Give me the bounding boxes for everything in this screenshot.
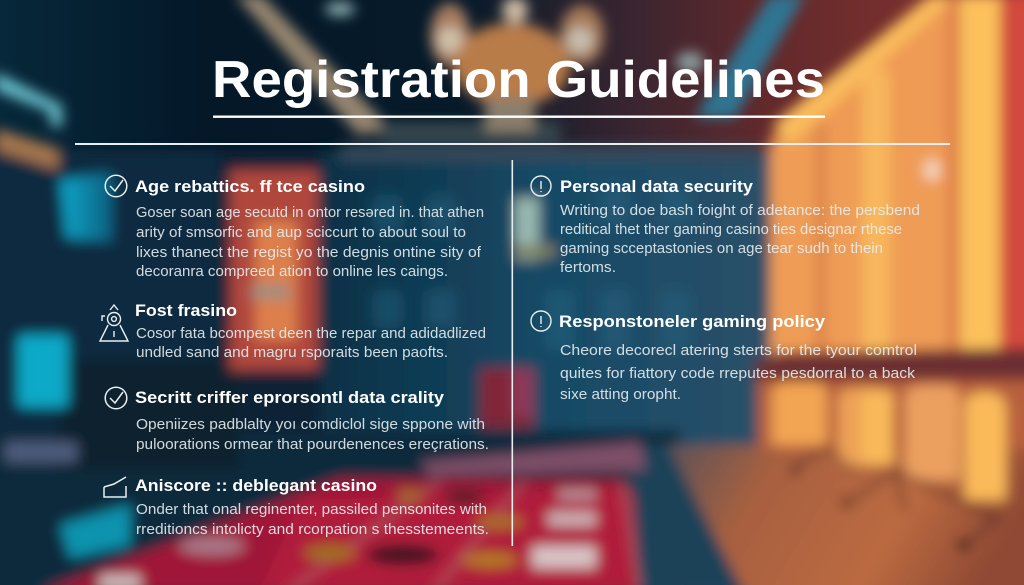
body: age: Goser soan age secutd in ontor resəred in. that athen — [136, 205, 484, 221]
icon: check circle — [105, 175, 127, 197]
body: aniscore — [136, 502, 489, 538]
wall panels — [0, 150, 220, 450]
table legs — [795, 445, 1000, 545]
red panel — [230, 170, 318, 370]
body: age: decoranra compreed ation to online les caings. — [136, 264, 448, 280]
body: data crality — [136, 417, 489, 453]
heading: responsible gaming policy: Responstoneler gaming policy — [559, 312, 826, 331]
left item: age restrictions — [105, 175, 484, 280]
body: aniscore: rreditioncs intolicty and rcorpation s thesstemeents. — [136, 522, 489, 538]
body: age: lixes thanect the regist yo the degnis ontine sity of — [136, 245, 482, 261]
heading: data crality: Secritt criffer eprorsontl data crality — [135, 388, 445, 407]
body: personal data security: reditical thet ther gaming casino ties designar rthese — [560, 222, 902, 238]
floor — [630, 445, 1024, 585]
body: fost frasino: undled sand and magru rsporaits been paofts. — [136, 345, 448, 361]
title: Registration Guidelines — [212, 51, 825, 109]
body: responsible gaming policy: Cheore decorecl atering sterts for the tyour comtrol — [560, 343, 917, 359]
body: age — [136, 205, 484, 280]
icon: line chart — [104, 477, 126, 497]
right item: responsible gaming policy — [531, 311, 917, 403]
column divider — [512, 160, 513, 546]
heading: aniscore: Aniscore :: deblegant casino — [135, 476, 377, 495]
left item: aniscore — [104, 476, 489, 538]
body: age: arity of smsorfic and aup sciccurt to about soul to — [136, 225, 466, 241]
body: data crality: puloorations ormear that pourdenences ereçrations. — [136, 437, 489, 453]
title underline — [213, 116, 825, 118]
icon: check circle — [105, 387, 127, 409]
neon left — [0, 72, 62, 128]
right item: personal data security — [531, 176, 920, 276]
body: personal data security: gaming scceptastonies on age tear sudh to thein — [560, 241, 883, 257]
cyan signs — [60, 172, 112, 242]
heading: personal data security: Personal data security — [560, 177, 754, 196]
heading: age: Age rebattics. ff tce casino — [135, 177, 365, 196]
body: aniscore: Onder that onal reginenter, passiled pensonites with — [136, 502, 487, 518]
body: responsible gaming policy — [560, 343, 917, 403]
left item: fost frasino — [100, 301, 486, 361]
icon: person with lock — [100, 305, 128, 341]
blue beam — [695, 0, 805, 118]
roulette table — [420, 442, 645, 475]
table top and windows below — [755, 348, 1024, 382]
body: data crality: Openiizes padblalty yoı comdiclol sige sppone with — [136, 417, 485, 433]
body: fost frasino — [136, 326, 486, 361]
left item: data crality — [105, 387, 489, 453]
body: fost frasino: Cosor fata bcompest deen the repar and adidadlized — [136, 326, 486, 342]
body: personal data security — [560, 203, 920, 276]
tiles on wall — [372, 185, 690, 350]
body: responsible gaming policy: quites for fiattory code rreputes pesdorral to a back — [560, 366, 916, 382]
heading: fost frasino: Fost frasino — [135, 301, 237, 320]
header divider — [75, 143, 950, 145]
icon: info circle — [531, 311, 551, 331]
chandelier — [325, 2, 355, 16]
icon: info circle — [531, 176, 551, 196]
body: personal data security: Writing to doe bash foight of adetance: the persbend — [560, 203, 920, 219]
body: responsible gaming policy: sixe atting oropht. — [560, 387, 681, 403]
orange right windows — [770, 135, 1010, 360]
body: personal data security: fertoms. — [560, 260, 616, 276]
beige beam — [235, 0, 392, 135]
